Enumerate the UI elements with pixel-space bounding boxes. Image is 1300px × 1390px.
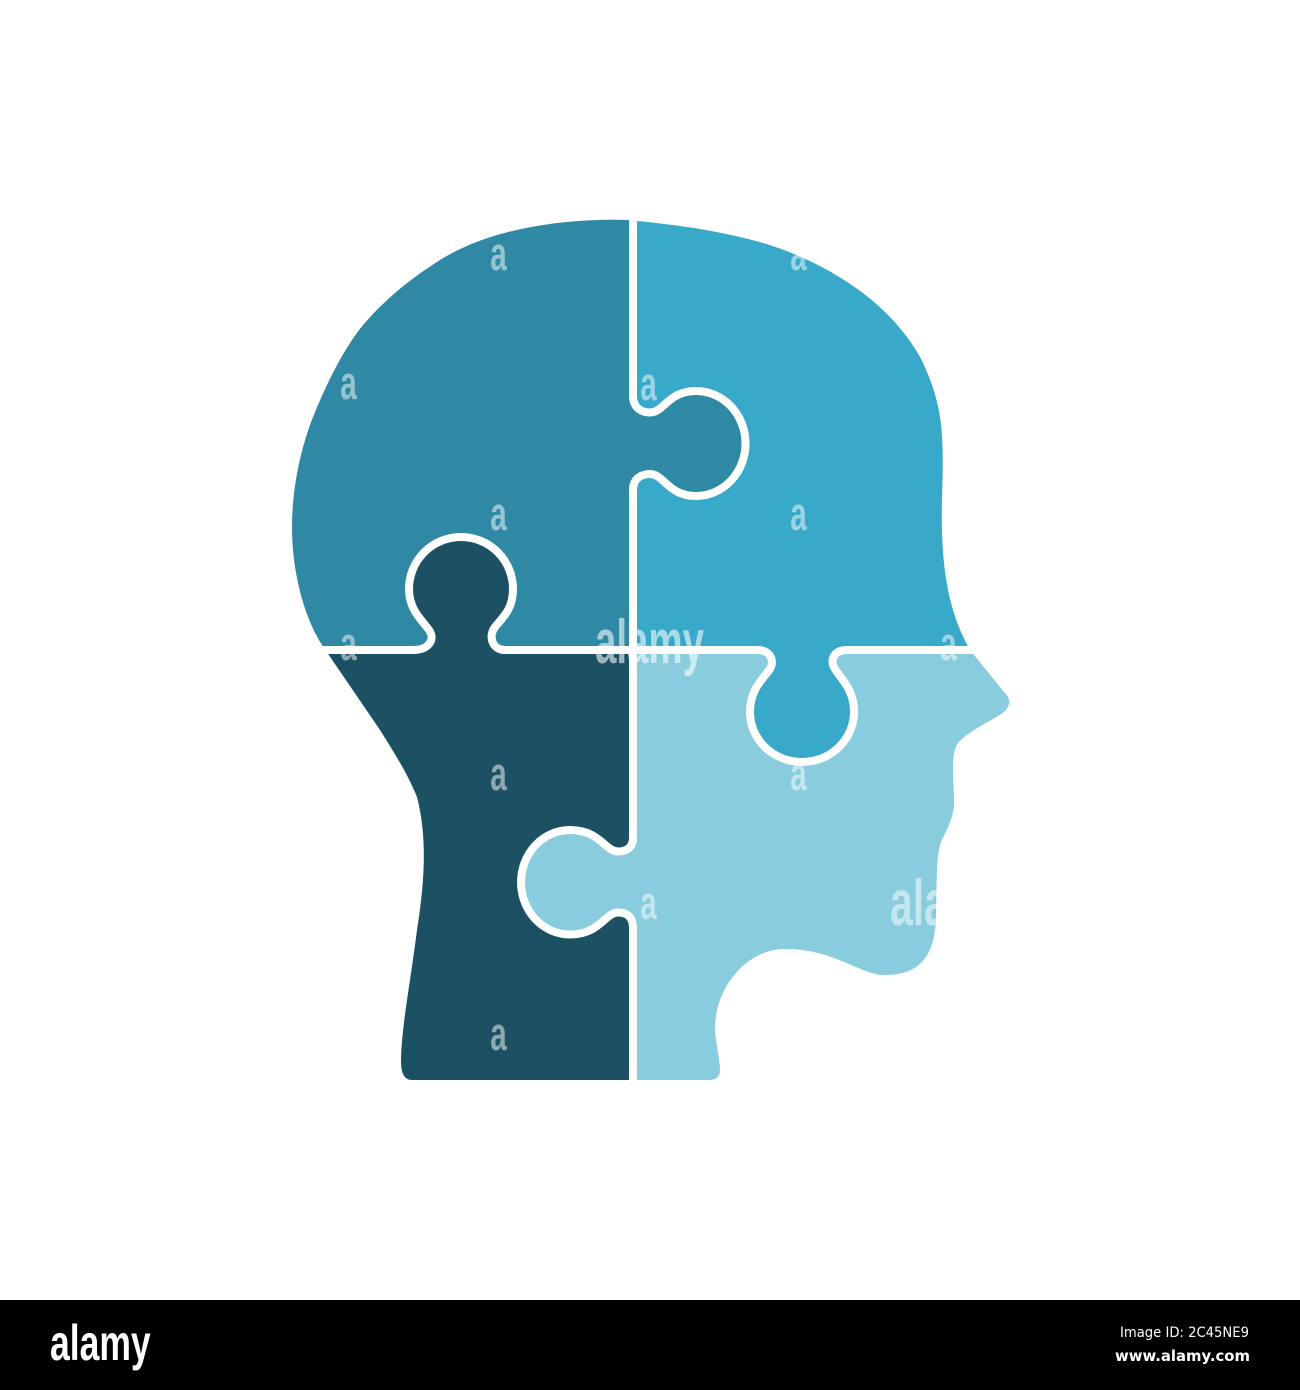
piece: bottom left xyxy=(328,541,629,1080)
watermark marks: a xyxy=(490,228,508,281)
watermark marks: a xyxy=(790,488,808,541)
watermark: cheek: alamy xyxy=(890,866,1006,939)
watermark marks: a xyxy=(940,618,958,671)
watermark marks: a xyxy=(340,357,358,410)
watermark marks: a xyxy=(490,748,508,801)
puzzle seams xyxy=(318,212,985,1090)
watermark marks: a xyxy=(790,228,808,281)
watermark marks: a xyxy=(640,877,658,930)
piece: top right xyxy=(637,221,968,758)
piece: bottom right xyxy=(521,650,1020,1090)
watermark marks: a xyxy=(490,1008,508,1061)
website: www.alamy.com xyxy=(1115,1347,1250,1365)
watermark marks xyxy=(340,228,958,1061)
watermark marks: a xyxy=(790,748,808,801)
watermark marks: a xyxy=(490,488,508,541)
footer logo: alamy xyxy=(50,1316,151,1372)
watermark marks: a xyxy=(340,618,358,671)
watermark marks: a xyxy=(640,358,658,411)
footer bar xyxy=(0,1300,1300,1390)
head puzzle xyxy=(280,210,1020,1090)
piece: top left xyxy=(280,210,746,650)
image id: Image ID: 2C45NE9 xyxy=(1120,1325,1249,1341)
watermark: centre: alamy xyxy=(595,607,704,676)
